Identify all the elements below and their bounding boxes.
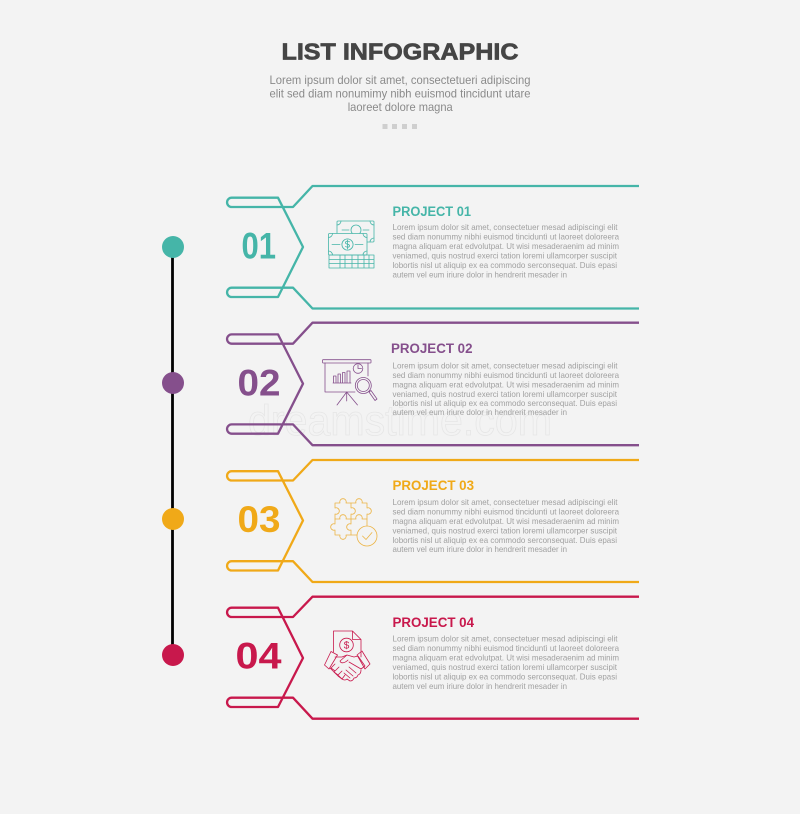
frame 01: [227, 186, 639, 308]
number 04: 04: [236, 636, 282, 676]
icon: puzzle with check: [331, 499, 377, 546]
timeline dot 4: [162, 644, 184, 666]
description 03: sed diam nonummy nibhi euismod tinciduntì ut laoreet doloreera: [392, 506, 619, 516]
description 01: veniamed, quis nostrud exerci tation loremi ullamcorper suscipit: [392, 250, 618, 260]
heading project 01: PROJECT 01: [392, 204, 472, 219]
frame 04: [227, 597, 639, 719]
description 02: [392, 360, 619, 417]
description 01: lobortis nisl ut aliquip ex ea commodo serconsequat. Duis epasi: [392, 260, 617, 270]
icon: document and handshake: [324, 631, 370, 681]
watermark: dreamstime.com: [248, 397, 552, 445]
description 04: [392, 634, 619, 691]
frame 03: [227, 460, 639, 582]
description 01: Lorem ipsum dolor sit amet, consectetuer mesad adipiscingi elit: [392, 222, 618, 232]
panel: project 02: [227, 323, 639, 445]
intro text: [270, 73, 531, 114]
description 01: [392, 222, 619, 280]
description 04: sed diam nonummy nibhi euismod tinciduntì ut laoreet doloreera: [392, 643, 619, 653]
description 02: Lorem ipsum dolor sit amet, consectetuer mesad adipiscingi elit: [392, 360, 618, 370]
heading project 04: PROJECT 04: [392, 615, 475, 630]
description 03: [392, 497, 619, 554]
timeline dot 1: [162, 236, 184, 258]
heading ornament squares: [382, 124, 417, 129]
heading project 02: PROJECT 02: [391, 341, 472, 356]
description 02: lobortis nisl ut aliquip ex ea commodo serconsequat. Duis epasi: [392, 398, 617, 408]
timeline dot 3: [162, 508, 184, 530]
description 04: lobortis nisl ut aliquip ex ea commodo serconsequat. Duis epasi: [392, 672, 617, 682]
description 03: autem vel eum iriure dolor in hendrerit mesader in: [392, 544, 567, 554]
intro text: laoreet dolore magna: [348, 100, 453, 114]
number 03: 03: [238, 499, 280, 540]
number 02: 02: [238, 362, 280, 404]
number 01: 01: [242, 226, 276, 266]
description 01: autem vel eum iriure dolor in hendrerit mesader in: [392, 270, 567, 280]
description 04: magna aliquam erat edvolutpat. Ut wisi mesaderaenim ad minim: [392, 652, 619, 662]
description 01: sed diam nonummy nibhi euismod tinciduntì ut laoreet doloreera: [392, 232, 619, 242]
icon: document and handshake: $: [344, 640, 350, 652]
timeline: [162, 236, 184, 666]
description 03: magna aliquam erat edvolutpat. Ut wisi mesaderaenim ad minim: [392, 516, 619, 526]
description 02: sed diam nonummy nibhi euismod tinciduntì ut laoreet doloreera: [392, 370, 619, 380]
icon: money: [328, 221, 374, 268]
description 04: veniamed, quis nostrud exerci tation loremi ullamcorper suscipit: [392, 662, 618, 672]
intro text: elit sed diam nonumimy nibh euismod tincidunt utare: [270, 86, 531, 100]
heading project 03: PROJECT 03: [392, 478, 474, 493]
intro text: Lorem ipsum dolor sit amet, consectetueri adipiscing: [270, 73, 530, 87]
title: LIST INFOGRAPHIC: [282, 38, 519, 64]
description 01: magna aliquam erat edvolutpat. Ut wisi mesaderaenim ad minim: [392, 241, 619, 251]
icon: presentation board: [322, 360, 377, 405]
description 02: autem vel eum iriure dolor in hendrerit mesader in: [392, 407, 567, 417]
panel: project 03: [227, 460, 639, 582]
description 02: magna aliquam erat edvolutpat. Ut wisi mesaderaenim ad minim: [392, 380, 619, 390]
description 03: veniamed, quis nostrud exerci tation loremi ullamcorper suscipit: [392, 526, 618, 536]
panel: project 04: [227, 597, 639, 719]
timeline dot 2: [162, 372, 184, 394]
frame 02: [227, 323, 639, 445]
description 03: Lorem ipsum dolor sit amet, consectetuer mesad adipiscingi elit: [392, 497, 618, 507]
description 03: lobortis nisl ut aliquip ex ea commodo serconsequat. Duis epasi: [392, 535, 617, 545]
description 04: Lorem ipsum dolor sit amet, consectetuer mesad adipiscingi elit: [392, 634, 618, 644]
description 02: veniamed, quis nostrud exerci tation loremi ullamcorper suscipit: [392, 389, 618, 399]
panel: project 01: [227, 186, 639, 308]
description 04: autem vel eum iriure dolor in hendrerit mesader in: [392, 681, 567, 691]
